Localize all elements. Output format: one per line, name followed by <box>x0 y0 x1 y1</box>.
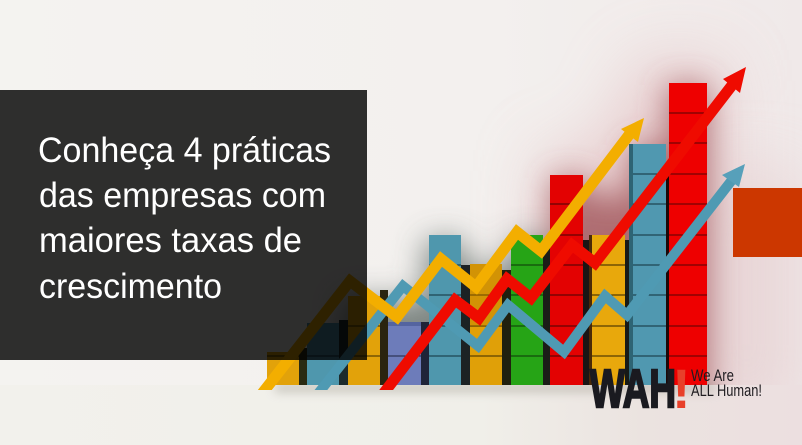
title <box>38 131 331 306</box>
title: Conheça 4 práticas <box>38 131 331 170</box>
bar: yellow 4 <box>589 235 633 385</box>
title: das empresas com <box>39 176 326 215</box>
bar: yellow 3 <box>470 264 511 385</box>
background wall and floor <box>270 0 802 445</box>
bar: yellow 1 <box>267 348 307 385</box>
logo: WAH! We Are All Human!: We Are <box>691 366 734 385</box>
bar: teal 2 <box>429 235 470 385</box>
title: crescimento <box>39 267 222 306</box>
logo: WAH! We Are All Human!: ALL Human! <box>691 381 762 400</box>
dark title panel <box>0 90 367 360</box>
bar chart <box>267 83 707 385</box>
title: maiores taxas de <box>39 221 302 260</box>
orange square accent <box>733 188 802 257</box>
trend arrow: teal <box>317 164 745 395</box>
bar: red 1 <box>550 175 592 385</box>
logo: WAH! We Are All Human!: WAH <box>590 359 676 419</box>
bar: teal 1 <box>307 320 348 385</box>
bar: yellow 2 <box>348 290 388 385</box>
logo: WAH! We Are All Human! <box>590 357 762 420</box>
bar: teal 3 <box>629 144 666 385</box>
bar: green <box>511 235 550 385</box>
trend arrow: red <box>380 67 746 398</box>
bar: red 2 <box>666 83 707 385</box>
trend arrow: yellow <box>257 118 644 400</box>
bar: blue <box>388 322 429 385</box>
logo: WAH! We Are All Human!: ! <box>672 357 691 420</box>
